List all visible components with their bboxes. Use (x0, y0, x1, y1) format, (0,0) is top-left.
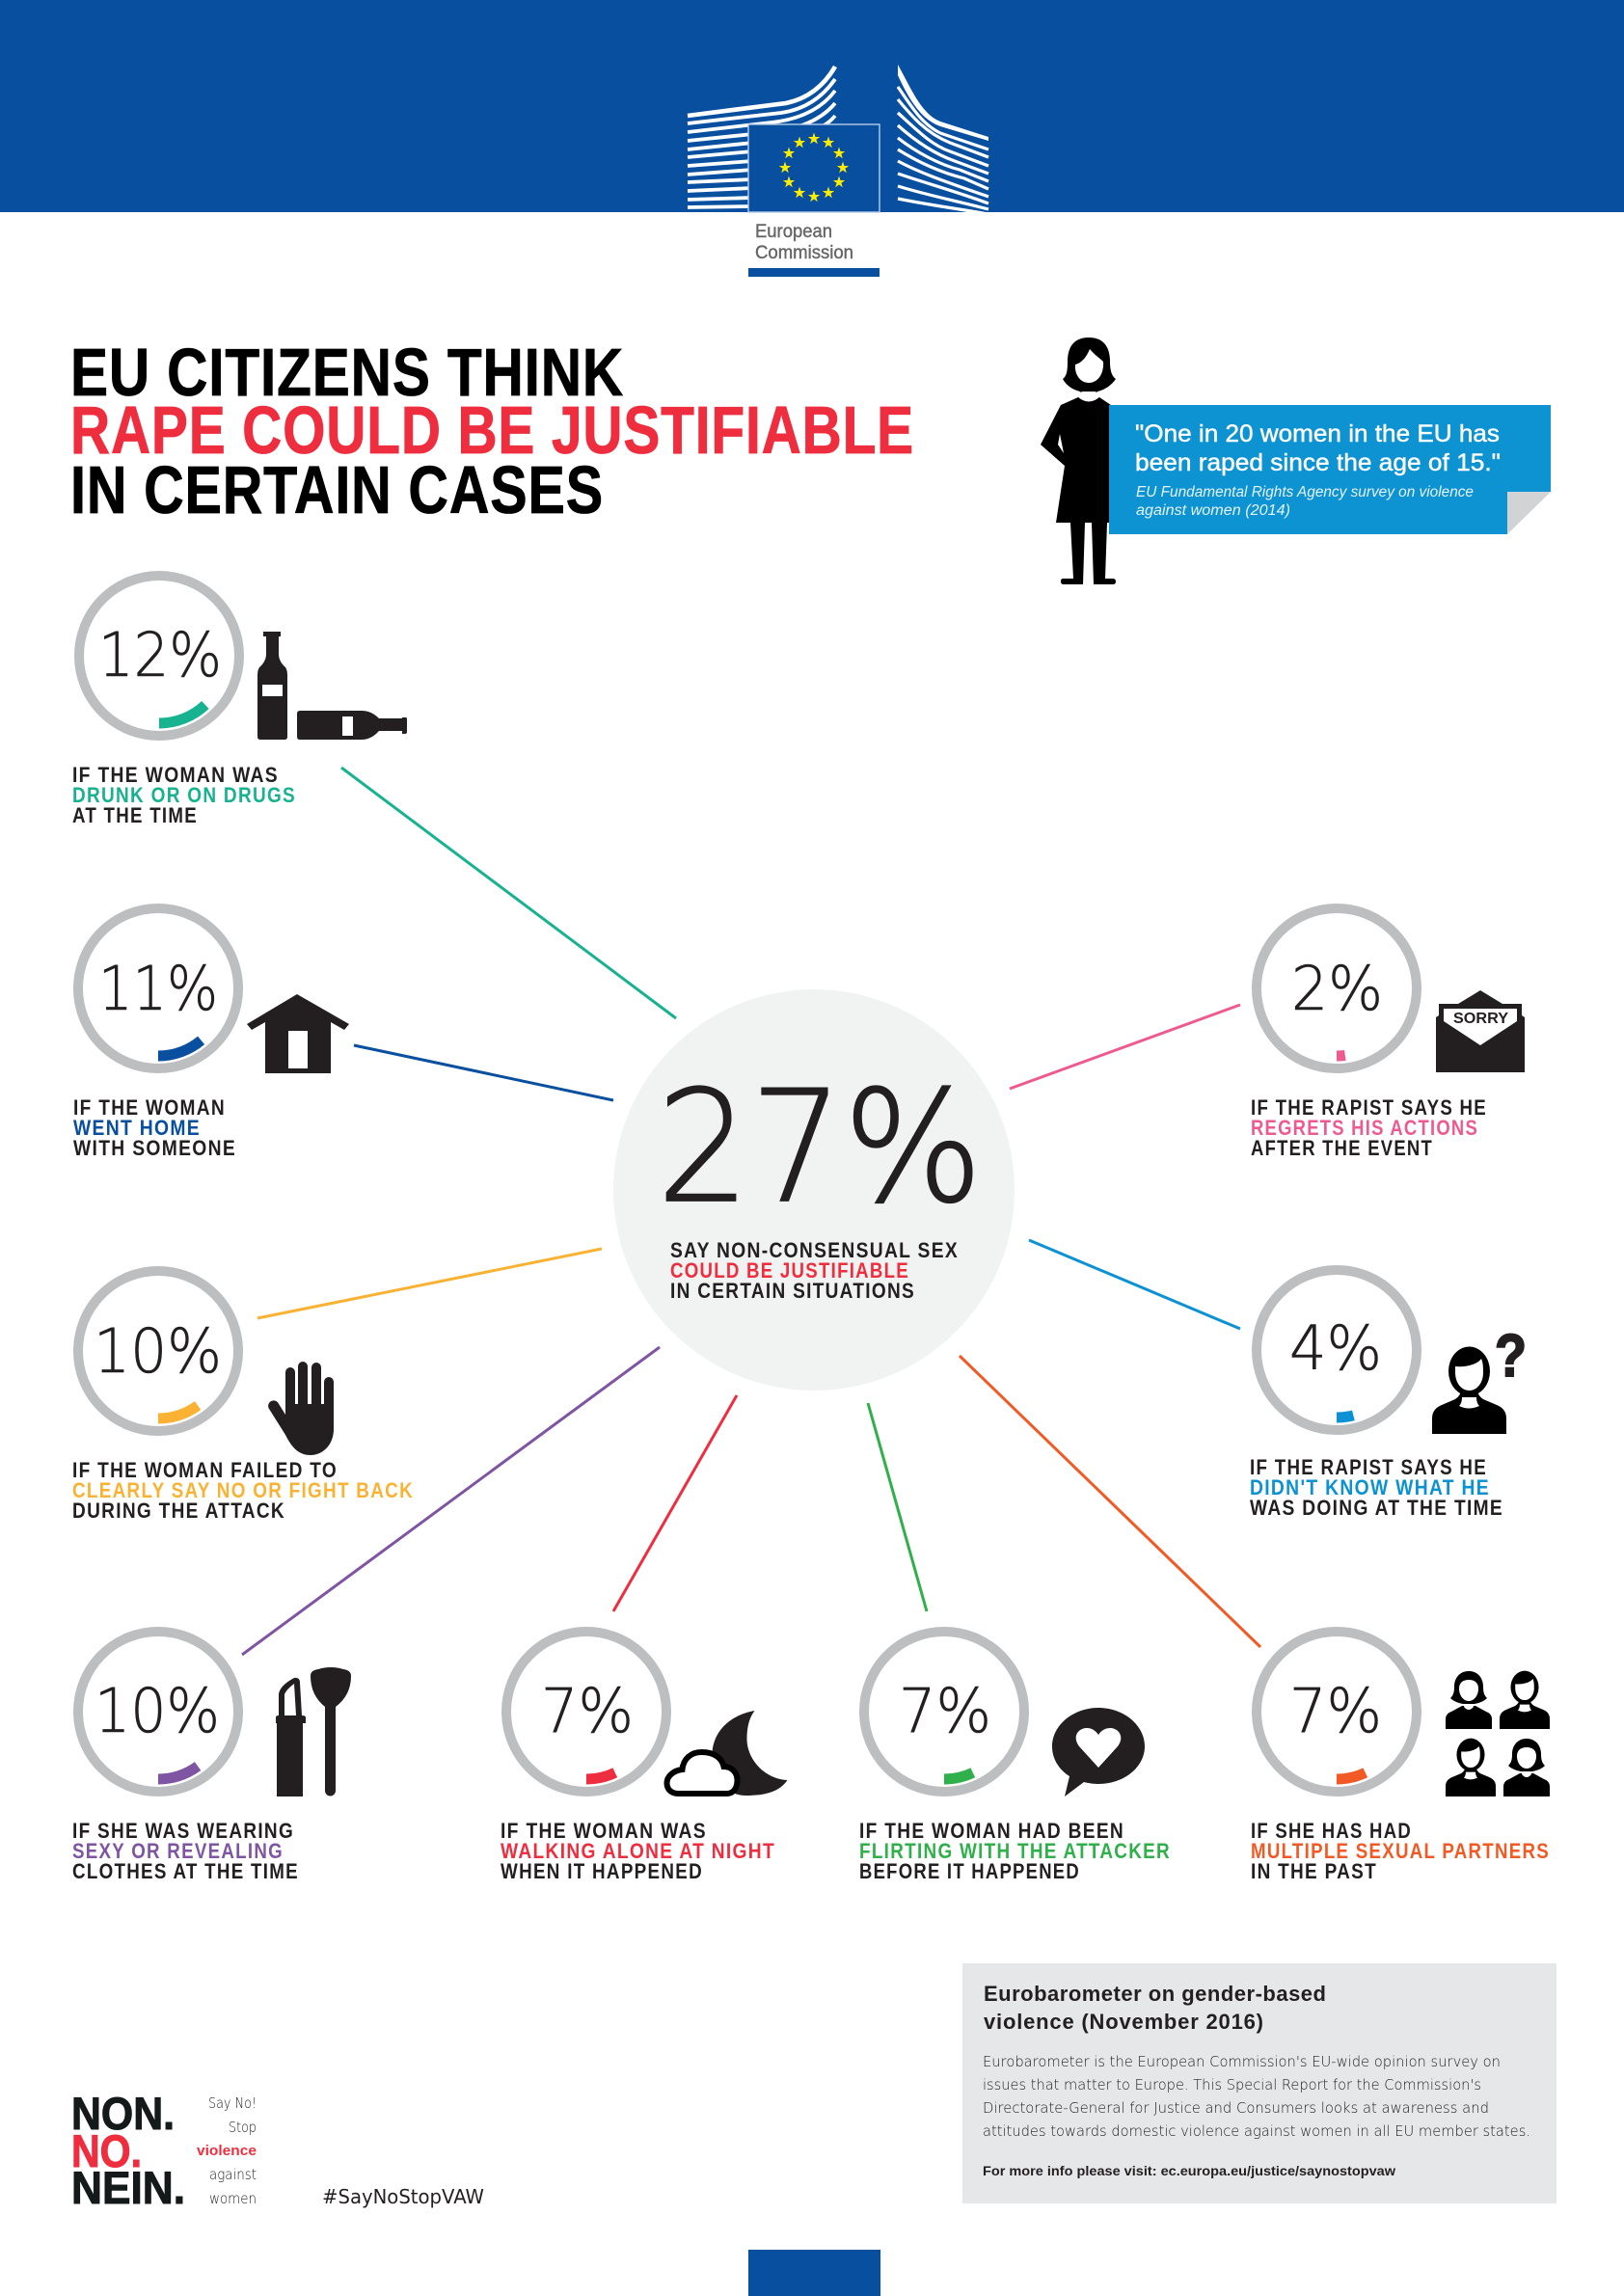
caption: IF THE WOMAN WAS (72, 763, 279, 787)
panel heading (984, 1982, 1326, 2034)
panel: 10% failed to say no (72, 1271, 414, 1523)
caption (72, 1819, 299, 1883)
caption: BEFORE IT HAPPENED (859, 1859, 1080, 1883)
caption (1251, 1095, 1487, 1160)
icon: speech bubble with heart (1052, 1708, 1145, 1796)
gauge: 7% (1289, 1676, 1382, 1746)
caption: WAS DOING AT THE TIME (1250, 1496, 1503, 1520)
quote text: been raped since the age of 15." (1135, 449, 1501, 476)
caption: AT THE TIME (72, 803, 198, 827)
logo wordmark: Commission (755, 243, 853, 263)
central caption: COULD BE JUSTIFIABLE (670, 1258, 909, 1283)
caption: IF THE WOMAN WAS (501, 1819, 707, 1843)
icon: person with question mark: ? (1495, 1323, 1527, 1390)
panel: 2% regrets (1251, 908, 1525, 1160)
hashtag: #SayNoStopVAW (322, 2185, 484, 2208)
gauge (78, 908, 238, 1068)
caption: WENT HOME (73, 1116, 201, 1140)
quote text: "One in 20 women in the EU has (1135, 420, 1500, 447)
caption: WITH SOMEONE (73, 1136, 236, 1160)
caption: SEXY OR REVEALING (72, 1839, 284, 1863)
panel: 7% walking alone (501, 1632, 787, 1883)
icon: person with question mark (1432, 1323, 1527, 1434)
campaign slogan (197, 2094, 257, 2207)
gauge (1257, 1632, 1417, 1792)
gauge (506, 1632, 666, 1792)
gauge: 4% (1289, 1313, 1382, 1384)
title: RAPE COULD BE JUSTIFIABLE (70, 392, 914, 468)
panel heading: violence (November 2016) (984, 2010, 1263, 2034)
panel body: Eurobarometer is the European Commission's EU-wide opinion survey on (983, 2053, 1501, 2070)
folded corner (1507, 492, 1551, 534)
caption: IF THE WOMAN FAILED TO (72, 1458, 338, 1482)
caption: IF THE WOMAN HAD BEEN (859, 1819, 1124, 1843)
icon: envelope: SORRY (1453, 1011, 1508, 1027)
logo: Non. No. Nein.: NEIN. (71, 2163, 185, 2214)
gauge (864, 1632, 1024, 1792)
panel: 7% flirting (859, 1632, 1171, 1883)
big number: 27% (657, 1057, 983, 1237)
icon: four people (1446, 1671, 1550, 1796)
campaign slogan: Say No! (208, 2094, 257, 2112)
caption (1251, 1819, 1550, 1883)
campaign slogan: women (209, 2190, 257, 2207)
central caption (670, 1238, 959, 1303)
logo: Non. No. Nein.: NO. (71, 2126, 142, 2177)
panel body: attitudes towards domestic violence against women in all EU member states. (983, 2122, 1530, 2140)
caption: WHEN IT HAPPENED (501, 1859, 703, 1883)
caption: DURING THE ATTACK (72, 1499, 285, 1523)
caption: IF THE WOMAN (73, 1095, 226, 1120)
icon: lipstick and brush (276, 1667, 351, 1796)
caption: FLIRTING WITH THE ATTACKER (859, 1839, 1171, 1863)
logo wordmark (755, 222, 853, 263)
caption: IN THE PAST (1251, 1859, 1377, 1883)
caption (501, 1819, 775, 1883)
panel heading: Eurobarometer on gender-based (984, 1982, 1326, 2006)
gauge (78, 1632, 238, 1792)
central caption: SAY NON-CONSENSUAL SEX (670, 1238, 959, 1262)
caption: CLEARLY SAY NO OR FIGHT BACK (72, 1478, 414, 1502)
icon: bottles (257, 632, 407, 740)
caption: REGRETS HIS ACTIONS (1251, 1116, 1478, 1140)
panel: 10% clothes (72, 1632, 351, 1883)
more info link: For more info please visit: ec.europa.eu/justice/saynostopvaw (983, 2163, 1395, 2178)
caption: DRUNK OR ON DRUGS (72, 783, 296, 807)
central circle: 27% (613, 989, 1015, 1391)
EU flag (748, 124, 880, 212)
gauge: 2% (1291, 954, 1383, 1024)
caption: MULTIPLE SEXUAL PARTNERS (1251, 1839, 1550, 1863)
panel: 11% went home (73, 908, 349, 1160)
quote source: EU Fundamental Rights Agency survey on violence (1136, 484, 1474, 500)
logo wordmark: European (755, 222, 832, 242)
caption (1250, 1455, 1503, 1520)
caption: IF SHE WAS WEARING (72, 1819, 294, 1843)
quote text (1135, 420, 1501, 476)
connector lines (242, 768, 1260, 1655)
caption: DIDN'T KNOW WHAT HE (1250, 1475, 1490, 1499)
logo: Non. No. Nein. (71, 2089, 185, 2214)
central caption: IN CERTAIN SITUATIONS (670, 1279, 915, 1303)
European Commission logo (688, 65, 988, 277)
gauge (1257, 908, 1417, 1068)
gauge (78, 1271, 238, 1431)
campaign slogan: Stop (229, 2119, 257, 2136)
caption: IF THE RAPIST SAYS HE (1250, 1455, 1487, 1479)
caption: WALKING ALONE AT NIGHT (501, 1839, 775, 1863)
gauge: 7% (541, 1676, 634, 1746)
icon: moon and cloud (667, 1711, 787, 1796)
gauge: 11% (98, 954, 218, 1024)
gauge: 12% (98, 620, 222, 690)
panel: 4% didn't know (1250, 1270, 1527, 1520)
caption: IF SHE HAS HAD (1251, 1819, 1412, 1843)
campaign slogan: against (209, 2166, 257, 2183)
title: EU CITIZENS THINK (70, 335, 624, 410)
quote source: against women (2014) (1136, 502, 1290, 519)
gauge: 10% (94, 1316, 222, 1387)
caption: IF THE RAPIST SAYS HE (1251, 1095, 1487, 1120)
gauge (79, 576, 239, 736)
title (70, 335, 914, 527)
building right wing (898, 65, 988, 214)
panel body: Directorate-General for Justice and Consumers looks at awareness and (983, 2099, 1489, 2117)
icon: standing woman (1041, 338, 1116, 584)
campaign slogan: violence (197, 2143, 257, 2159)
caption (72, 1458, 414, 1523)
building left wing (688, 67, 835, 207)
caption: AFTER THE EVENT (1251, 1136, 1433, 1160)
gauge (1257, 1270, 1417, 1430)
caption (72, 763, 296, 827)
icon: raised hand (268, 1362, 334, 1455)
caption (73, 1095, 236, 1160)
footer tab (748, 2250, 880, 2296)
caption (859, 1819, 1171, 1883)
panel: 12% drunk (72, 576, 407, 827)
gauge: 7% (899, 1676, 991, 1746)
icon: envelope (1436, 990, 1525, 1072)
header band (0, 0, 1624, 212)
panel body: issues that matter to Europe. This Special Report for the Commission's (983, 2076, 1481, 2093)
quote source (1136, 484, 1474, 519)
panel body (983, 2053, 1530, 2140)
logo: Non. No. Nein.: NON. (71, 2089, 175, 2140)
gauge: 10% (95, 1676, 220, 1746)
panel: quote callout (1109, 405, 1551, 534)
title: IN CERTAIN CASES (70, 452, 604, 527)
icon: house (247, 994, 349, 1073)
panel: 7% multiple partners (1251, 1632, 1550, 1883)
panel: Eurobarometer info (962, 1963, 1556, 2203)
caption: CLOTHES AT THE TIME (72, 1859, 299, 1883)
